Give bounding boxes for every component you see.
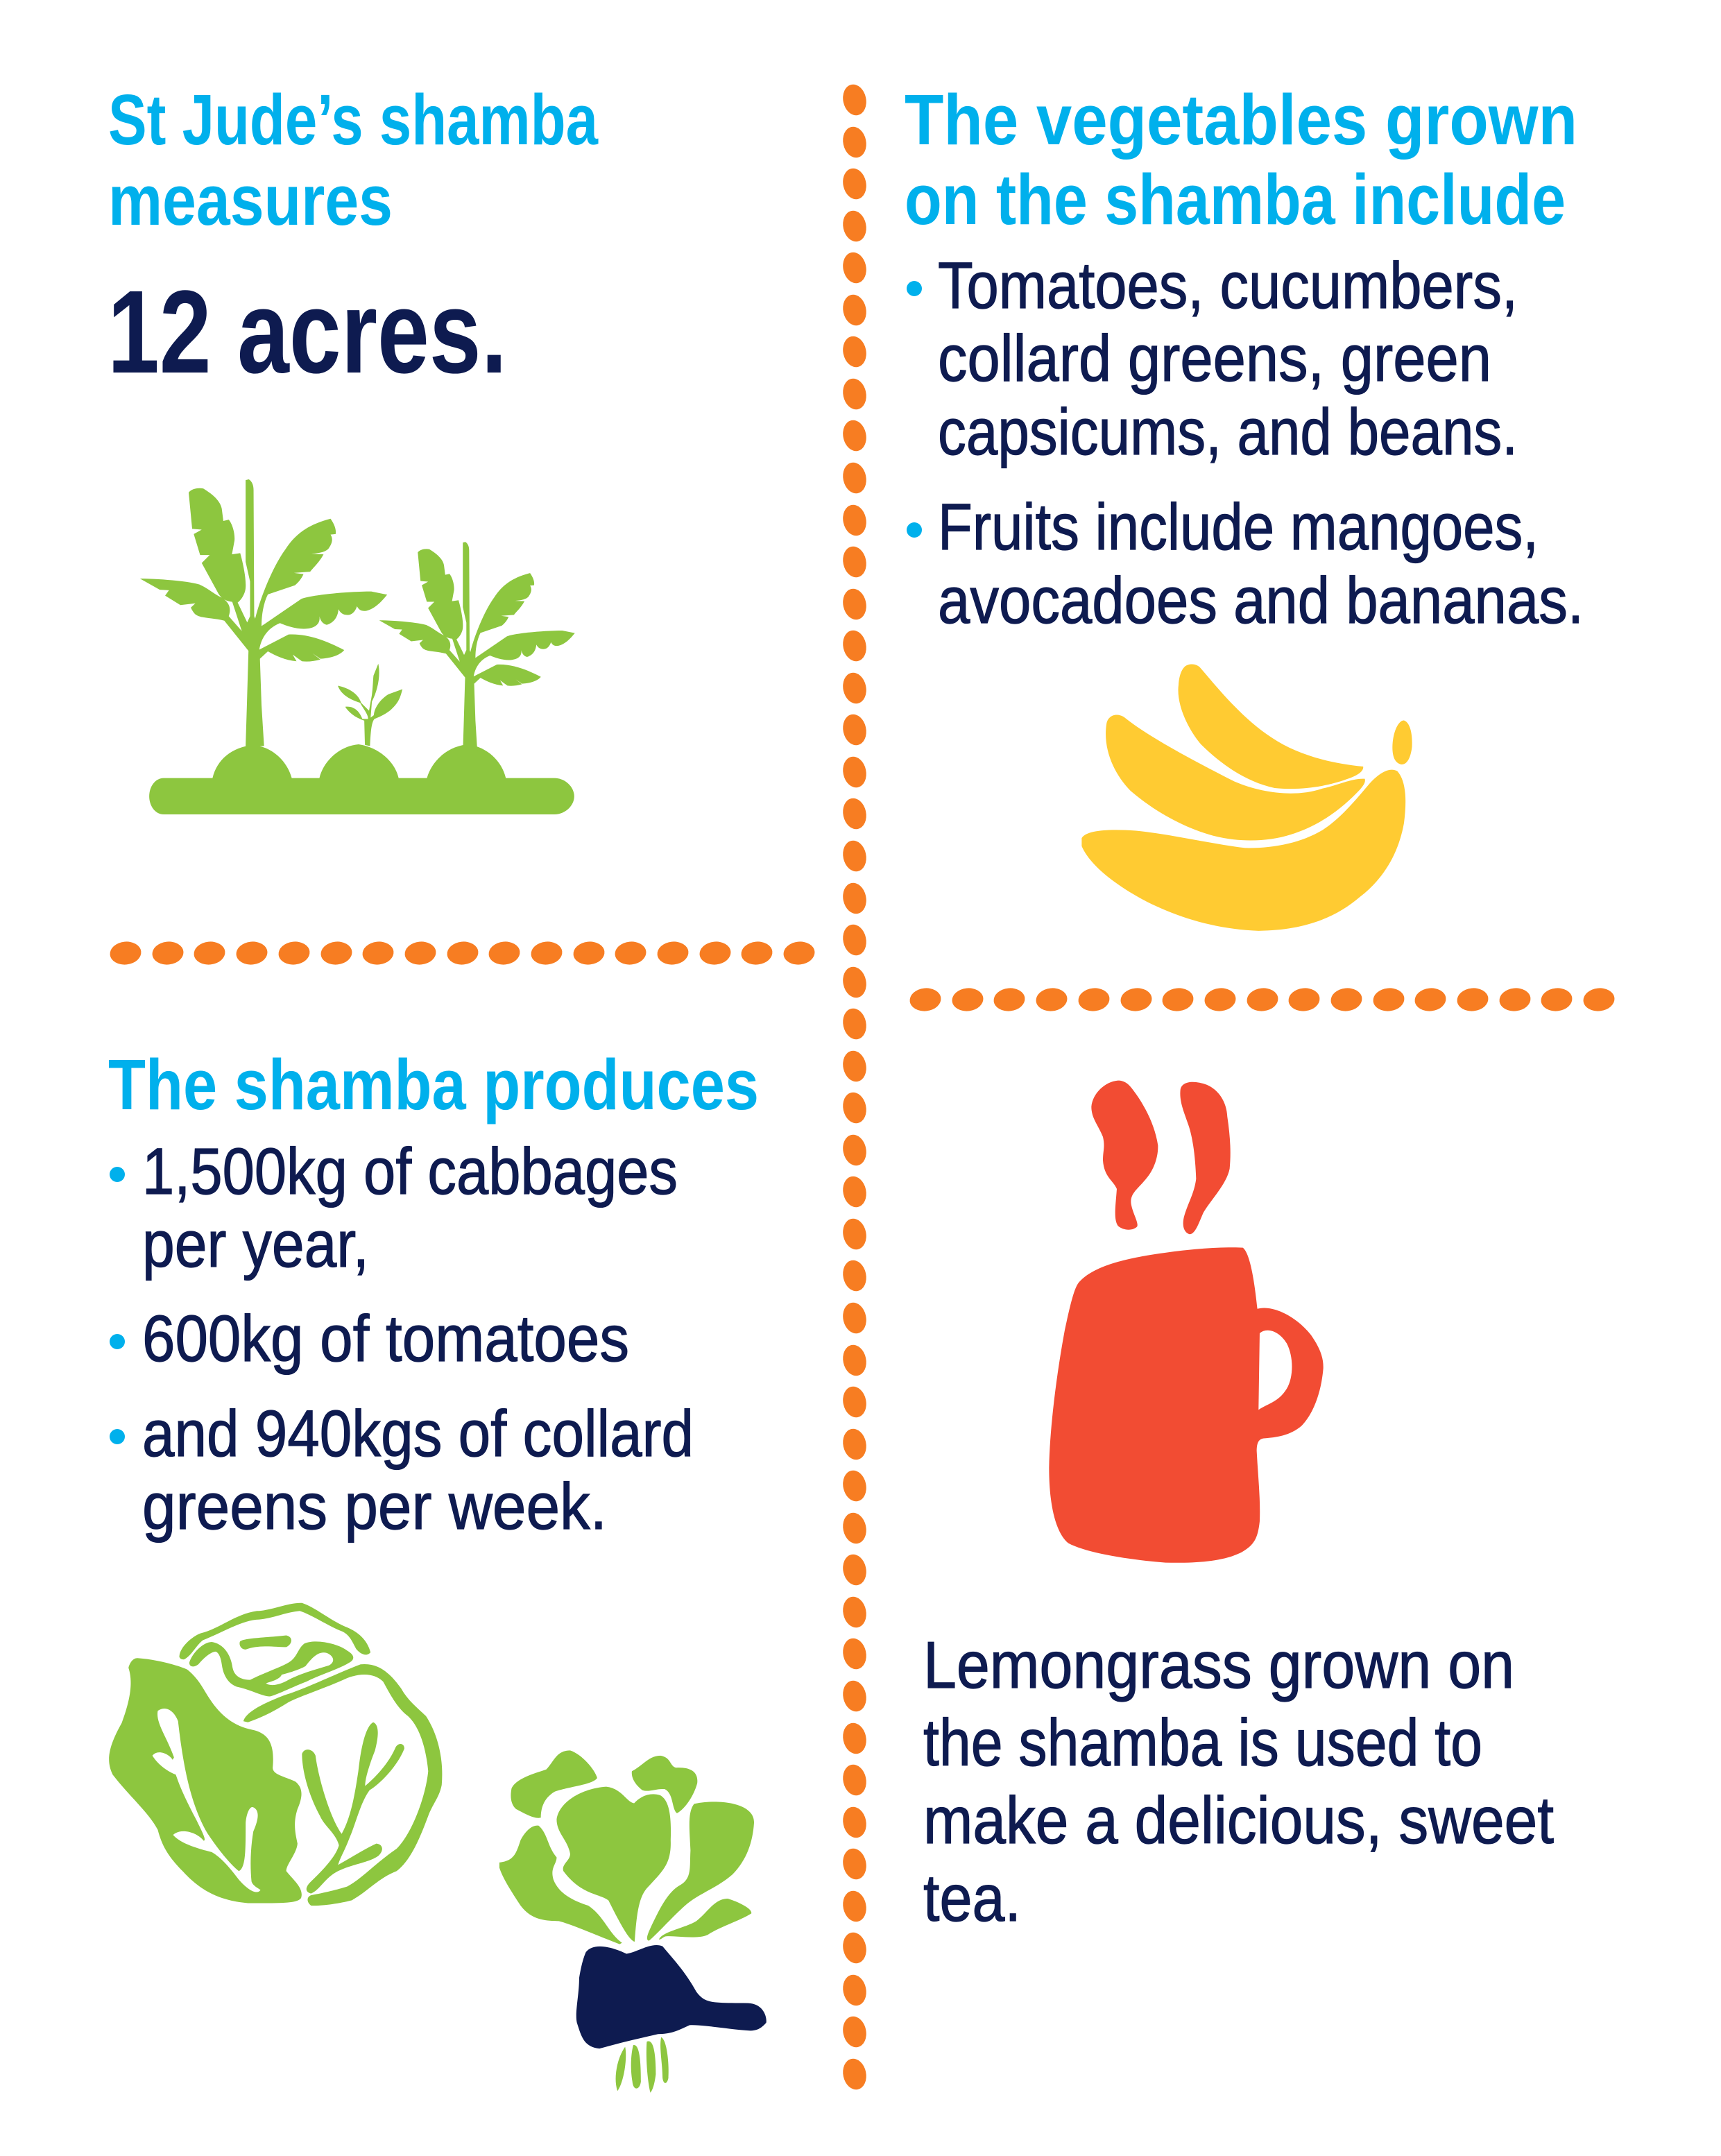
- bullet: collard greens: and 940kgs of collard: [142, 1397, 694, 1471]
- heading: St Jude's shamba measures: St Jude’s shamba: [108, 80, 599, 160]
- text: lemongrass tea description: tea.: [923, 1861, 1021, 1935]
- vertical dotted divider: [840, 83, 869, 2091]
- bullet: cabbages: 1,500kg of cabbages: [142, 1135, 678, 1208]
- icon: banana plants on ground: [140, 479, 575, 814]
- text: lemongrass tea description: [923, 1628, 1554, 1935]
- text: lemongrass tea description: Lemongrass grown on: [923, 1628, 1514, 1702]
- panel: vegetables and fruits: [905, 80, 1584, 931]
- bullet: cabbages: per year,: [142, 1208, 369, 1281]
- text: lemongrass tea description: the shamba is used to: [923, 1706, 1482, 1780]
- heading: St Jude's shamba measures: [108, 80, 599, 240]
- icon: steaming mug: [1049, 1081, 1324, 1563]
- panel: lemongrass tea: [923, 1081, 1554, 1935]
- icon: cabbage: [109, 1603, 442, 1906]
- heading: vegetables grown: on the shamba include: [905, 160, 1566, 239]
- bullet: collard greens: [110, 1397, 694, 1543]
- icon: collard greens bunch: [499, 1750, 767, 2093]
- bullet: cabbages: [110, 1135, 678, 1281]
- bullet list: vegetables: capsicums, and beans.: [938, 395, 1518, 469]
- bullet list: vegetables: [907, 249, 1518, 469]
- panel: shamba produce: [108, 1045, 767, 2093]
- icon: bananas: [1081, 665, 1412, 931]
- bullet list: vegetables: collard greens, green: [938, 322, 1491, 395]
- bullet list: fruits: avocadoes and bananas.: [938, 564, 1584, 638]
- panel: shamba size: [108, 80, 599, 814]
- bullet: tomatoes: 600kg of tomatoes: [142, 1302, 629, 1376]
- stat: 12 acres: 12 acres.: [108, 266, 507, 398]
- left horizontal dotted divider: [109, 940, 816, 966]
- bullet list: fruits: [907, 490, 1584, 638]
- bullet list: fruits: Fruits include mangoes,: [938, 490, 1539, 564]
- right horizontal dotted divider: [909, 986, 1616, 1013]
- bullet: collard greens: greens per week.: [142, 1470, 607, 1543]
- heading: St Jude's shamba measures: measures: [108, 160, 393, 240]
- heading: vegetables grown: The vegetables grown: [905, 80, 1577, 160]
- text: lemongrass tea description: make a delicious, sweet: [923, 1783, 1554, 1858]
- bullet list: vegetables: Tomatoes, cucumbers,: [938, 249, 1518, 323]
- heading: vegetables grown: [905, 80, 1577, 239]
- heading: The shamba produces: The shamba produces: [108, 1045, 759, 1124]
